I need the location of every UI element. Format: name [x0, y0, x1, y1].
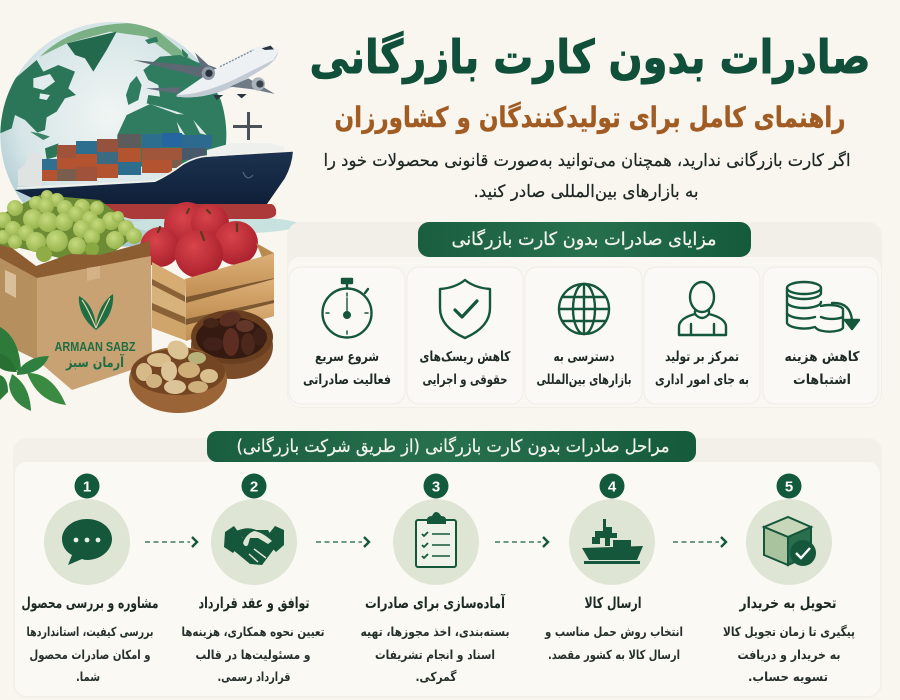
- badge 2: [242, 474, 266, 498]
- badge 4: 4: [608, 478, 617, 496]
- icon: clipboard: [393, 499, 479, 585]
- card: globe: [525, 267, 642, 404]
- step text: بررسی کیفیت، استانداردها: [26, 624, 154, 639]
- step text: اسناد و انجام تشریفات: [375, 647, 495, 663]
- step text: انتخاب روش حمل مناسب و: [544, 624, 683, 639]
- label: شروع سریع: [315, 349, 379, 365]
- icon: package: [746, 499, 832, 585]
- card: shield: [407, 267, 523, 404]
- step text: و مسئولیت‌ها در قالب: [196, 647, 310, 662]
- intro text: اگر کارت بازرگانی ندارید، همچنان می‌توانید به‌صورت قانونی محصولات خود را: [324, 150, 850, 171]
- label: فعالیت صادراتی: [303, 372, 391, 388]
- icon: airplane: [133, 45, 278, 100]
- icon: handshake: [211, 499, 297, 585]
- step 5: [723, 474, 855, 684]
- step text: تسویه حساب.: [748, 669, 828, 684]
- arrow 3: [495, 537, 548, 547]
- label: [303, 349, 391, 388]
- logo: Armaan Sabz: [54, 294, 136, 371]
- step title: مشاوره و بررسی محصول: [22, 594, 158, 612]
- step text: تعیین نحوه همکاری، هزینه‌ها: [182, 624, 324, 639]
- heading: benefits: مزایای صادرات بدون کارت بازرگانی: [452, 228, 716, 250]
- badge 2: 2: [250, 478, 258, 496]
- icon: person: [679, 282, 726, 335]
- label: [784, 349, 860, 388]
- card: coins: [763, 267, 878, 404]
- icon: grapes: [0, 190, 142, 262]
- water: [130, 216, 300, 234]
- step title: آماده‌سازی برای صادرات: [365, 594, 506, 612]
- icon: coins: [787, 282, 859, 332]
- icon: globe: [559, 284, 609, 334]
- illustration: export scene: [0, 20, 300, 413]
- icon: ship: [569, 499, 655, 585]
- icon: shield: [440, 280, 490, 338]
- step text: [182, 624, 324, 684]
- step text: [544, 624, 683, 662]
- icon: apple crate: [140, 202, 274, 341]
- icon: globe: [0, 20, 230, 247]
- label: تمرکز بر تولید: [665, 349, 739, 365]
- label: دسترسی به: [554, 349, 615, 365]
- step title: تحویل به خریدار: [739, 594, 836, 612]
- step text: پیگیری تا زمان تجویل کالا: [723, 624, 855, 639]
- heading: benefits: [418, 222, 751, 257]
- logo: Armaan Sabz: آرمان سبز: [65, 353, 125, 371]
- intro text: [324, 150, 850, 202]
- heading: steps: [207, 431, 696, 462]
- intro text: به بازارهای بین‌المللی صادر کنید.: [474, 182, 698, 202]
- badge 1: 1: [83, 478, 91, 496]
- step text: به خریدار و دریافت: [738, 647, 840, 662]
- icon: stopwatch: [322, 279, 372, 338]
- label: به جای امور اداری: [655, 372, 749, 388]
- heading: steps: مراحل صادرات بدون کارت بازرگانی (از طریق شرکت بازرگانی): [236, 436, 670, 457]
- icon: cardboard box: [0, 241, 152, 390]
- step text: [26, 624, 154, 684]
- step 1: [22, 474, 158, 684]
- card: person: [644, 267, 760, 404]
- arrow 1: [145, 537, 197, 547]
- step 4: [544, 474, 683, 662]
- panel: benefits: [287, 222, 882, 408]
- label: [655, 349, 749, 388]
- badge 1: [74, 474, 100, 498]
- step text: بسته‌بندی، اخذ مجوزها، تهیه: [360, 624, 510, 639]
- label: کاهش هزینه: [784, 349, 860, 365]
- label: [536, 349, 632, 388]
- label: [420, 349, 511, 388]
- step text: [360, 624, 510, 684]
- arrow 2: [316, 537, 369, 547]
- step text: گمرکی.: [416, 669, 457, 684]
- badge 3: [424, 474, 448, 498]
- step 3: [360, 474, 510, 684]
- icon: pistachio bowl: [129, 337, 227, 413]
- badge 5: 5: [785, 478, 793, 496]
- label: حقوقی و اجرایی: [422, 372, 508, 388]
- step title: ارسال کالا: [584, 594, 642, 612]
- step text: قرارداد رسمی.: [218, 669, 290, 684]
- step text: ارسال کالا به کشور مقصد.: [548, 647, 680, 662]
- step text: و امکان صادرات محصول: [30, 647, 150, 662]
- label: بازارهای بین‌المللی: [536, 372, 632, 388]
- step 2: [182, 474, 324, 684]
- icon: chat bubble: [44, 499, 130, 585]
- step text: شما.: [76, 669, 100, 684]
- card: stopwatch: [289, 267, 405, 404]
- arrow 4: [673, 537, 726, 547]
- icon: dates bowl: [191, 309, 273, 379]
- icon: leaves: [0, 327, 66, 411]
- badge 3: 3: [432, 478, 440, 496]
- step text: [723, 624, 855, 684]
- label: اشتباهات: [793, 372, 851, 388]
- badge 5: [776, 474, 802, 498]
- logo: Armaan Sabz: ARMAAN SABZ: [54, 339, 136, 354]
- icon: cargo ship: [15, 112, 293, 219]
- step title: توافق و عقد قرارداد: [198, 594, 310, 612]
- label: کاهش ریسک‌های: [420, 349, 511, 365]
- panel: steps: [13, 431, 882, 698]
- badge 4: [600, 474, 624, 498]
